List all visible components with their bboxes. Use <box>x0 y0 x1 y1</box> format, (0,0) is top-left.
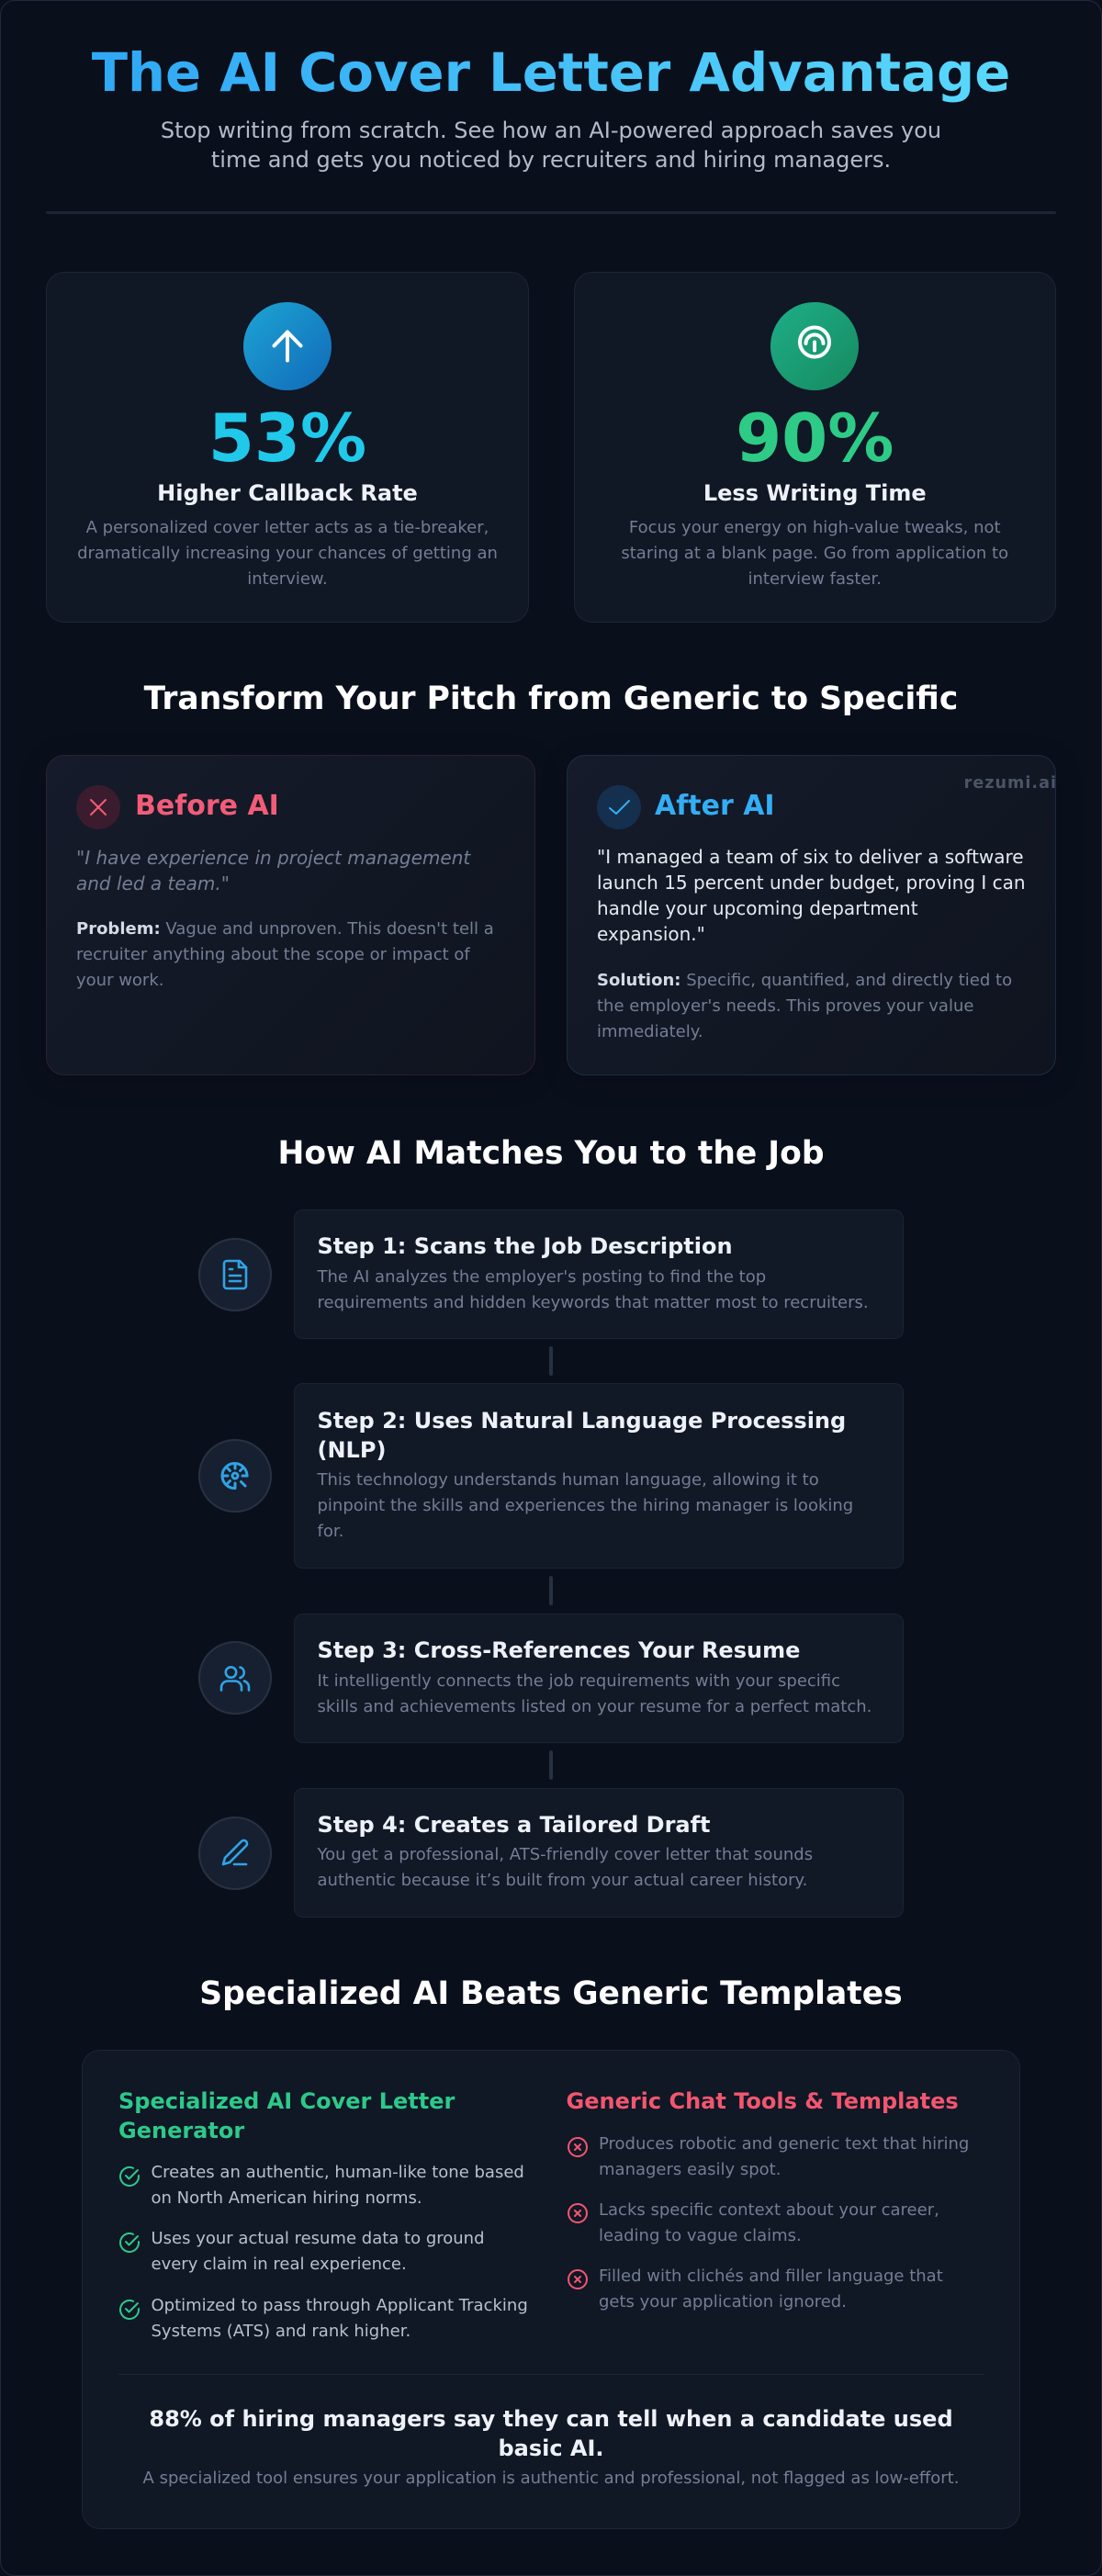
step 2 card <box>294 1383 904 1569</box>
panel: before AI <box>46 755 535 1075</box>
stat description: interview. <box>247 569 328 589</box>
stat description <box>77 518 498 589</box>
stat value: 90% <box>736 399 894 477</box>
benefit 3 <box>119 2296 528 2340</box>
generic quote <box>76 847 471 894</box>
stat label: Higher Callback Rate <box>157 480 418 506</box>
drawback text <box>599 2267 943 2311</box>
icon: x circle <box>568 2203 588 2223</box>
drawback text: gets your application ignored. <box>599 2292 847 2311</box>
benefit text <box>151 2296 528 2340</box>
stat description: dramatically increasing your chances of getting an <box>77 544 498 563</box>
stat description: A personalized cover letter acts as a tie-breaker, <box>86 518 489 537</box>
problem explanation: your work. <box>76 971 163 990</box>
generic quote: and led a team." <box>76 872 230 894</box>
icon: users <box>198 1641 272 1715</box>
drawback text: leading to vague claims. <box>599 2226 802 2244</box>
benefit text: Uses your actual resume data to ground <box>151 2229 485 2248</box>
callout subtext: A specialized tool ensures your application is authentic and professional, not flagged as low-effort. <box>143 2469 959 2488</box>
column: specialized AI <box>118 2088 528 2340</box>
solution explanation: the employer's needs. This proves your value <box>597 996 973 1016</box>
icon: document <box>198 1238 272 1311</box>
icon: check circle <box>119 2165 140 2187</box>
stat label: Less Writing Time <box>703 480 927 506</box>
specific quote: expansion." <box>597 923 705 945</box>
specific quote: handle your upcoming department <box>597 897 918 919</box>
statistic callout: basic AI. <box>498 2435 604 2461</box>
column heading: Generator <box>118 2118 244 2143</box>
drawback text: Lacks specific context about your career, <box>599 2200 939 2219</box>
step description <box>318 1845 813 1890</box>
step 3 card <box>294 1613 904 1743</box>
watermark: rezumi.ai: rezumi.ai <box>964 774 1056 793</box>
step 1 <box>198 1209 904 1339</box>
icon: check circle <box>119 2232 140 2253</box>
drawback text <box>599 2200 939 2244</box>
step description <box>317 1470 853 1541</box>
benefit 2 <box>119 2229 485 2274</box>
icon: x circle <box>568 2269 588 2289</box>
step 2 <box>198 1383 904 1569</box>
step description: skills and achievements listed on your resume for a perfect match. <box>318 1697 871 1715</box>
statistic callout <box>149 2406 953 2461</box>
drawback text: managers easily spot. <box>599 2160 781 2178</box>
title: The AI Cover Letter Advantage <box>92 42 1010 104</box>
drawback text: Filled with clichés and filler language that <box>599 2267 943 2285</box>
section heading: transform your pitch: Transform Your Pitch from Generic to Specific <box>144 681 958 717</box>
specific quote: launch 15 percent under budget, proving I can <box>597 872 1026 894</box>
icon: check circle <box>119 2300 140 2320</box>
benefit text <box>151 2229 485 2274</box>
solution explanation <box>597 971 1012 1041</box>
step title: Step 1: Scans the Job Description <box>318 1232 733 1258</box>
benefit text: Systems (ATS) and rank higher. <box>151 2322 410 2340</box>
panel: comparison <box>82 2050 1020 2529</box>
icon: up arrow <box>243 302 332 390</box>
section heading: how AI matches: How AI Matches You to the Job <box>277 1135 825 1172</box>
solution explanation: immediately. <box>597 1022 703 1041</box>
benefit text: on North American hiring norms. <box>151 2188 422 2208</box>
step description: for. <box>318 1522 343 1541</box>
step description: authentic because it’s built from your actual career history. <box>318 1871 807 1890</box>
heading: before AI: Before AI <box>135 790 279 822</box>
benefit 1 <box>119 2163 524 2208</box>
benefit text: every claim in real experience. <box>151 2255 407 2274</box>
stat card: 53% higher callback rate <box>46 272 529 623</box>
icon: blue check <box>597 785 641 829</box>
step title: (NLP) <box>318 1437 386 1463</box>
step title: Step 3: Cross-References Your Resume <box>318 1637 800 1663</box>
problem explanation <box>76 919 494 990</box>
step description: This technology understands human language, allowing it to <box>318 1470 819 1490</box>
step description: pinpoint the skills and experiences the hiring manager is looking <box>318 1496 853 1515</box>
stat description <box>621 518 1008 589</box>
solution explanation: Solution: Specific, quantified, and directly tied to <box>597 971 1012 990</box>
step description <box>318 1671 871 1715</box>
panel: after AI <box>567 755 1056 1075</box>
step 1 card <box>294 1209 904 1339</box>
icon: language dial <box>198 1439 272 1513</box>
drawback 2 <box>568 2200 939 2244</box>
drawback text <box>599 2134 969 2178</box>
drawback text: Produces robotic and generic text that hiring <box>599 2134 969 2153</box>
connector <box>549 1346 553 1376</box>
subtitle: time and gets you noticed by recruiters and hiring managers. <box>211 147 891 173</box>
statistic callout: 88% of hiring managers say they can tell when a candidate used <box>149 2406 953 2432</box>
icon: circular gauge <box>770 302 859 390</box>
step 4 <box>198 1788 904 1918</box>
column: generic tools <box>566 2088 969 2311</box>
icon: pen <box>198 1817 272 1890</box>
stat description: interview faster. <box>748 569 882 589</box>
step description <box>317 1267 869 1311</box>
step title: Step 4: Creates a Tailored Draft <box>318 1811 711 1837</box>
step description: requirements and hidden keywords that matter most to recruiters. <box>318 1293 869 1311</box>
subtitle <box>161 118 941 173</box>
connector <box>549 1750 553 1780</box>
generic quote: "I have experience in project management <box>76 847 470 869</box>
step 4 card <box>294 1787 904 1918</box>
column heading <box>118 2088 455 2143</box>
icon: x circle <box>568 2137 588 2157</box>
step title <box>318 1408 846 1463</box>
step description: It intelligently connects the job requirements with your specific <box>318 1671 840 1690</box>
specific quote: "I managed a team of six to deliver a software <box>597 846 1024 868</box>
stat card: 90% less writing time <box>573 272 1056 623</box>
drawback 1 <box>568 2134 969 2178</box>
stat value: 53% <box>208 399 366 477</box>
drawback 3 <box>568 2267 943 2311</box>
problem explanation: recruiter anything about the scope or impact of <box>76 945 470 964</box>
heading: after AI: After AI <box>655 790 775 822</box>
step title: Step 2: Uses Natural Language Processing <box>318 1408 846 1434</box>
column heading: Specialized AI Cover Letter <box>118 2088 455 2114</box>
problem explanation: Problem: Vague and unproven. This doesn't tell a <box>76 919 494 939</box>
benefit text: Creates an authentic, human-like tone based <box>151 2163 524 2182</box>
specific quote <box>597 846 1026 945</box>
stat description: Focus your energy on high-value tweaks, not <box>629 518 1001 537</box>
connector <box>549 1576 553 1605</box>
stat description: staring at a blank page. Go from application to <box>621 544 1008 563</box>
section heading: specialized AI beats templates: Specialized AI Beats Generic Templates <box>199 1975 903 2012</box>
benefit text <box>151 2163 524 2208</box>
subtitle: Stop writing from scratch. See how an AI-powered approach saves you <box>161 118 941 143</box>
benefit text: Optimized to pass through Applicant Tracking <box>151 2296 528 2314</box>
step description: You get a professional, ATS-friendly cover letter that sounds <box>318 1845 813 1864</box>
step 3 <box>198 1614 904 1743</box>
column heading: Generic Chat Tools & Templates <box>566 2088 959 2114</box>
icon: red cross <box>76 785 120 829</box>
step description: The AI analyzes the employer's posting to find the top <box>318 1267 766 1286</box>
